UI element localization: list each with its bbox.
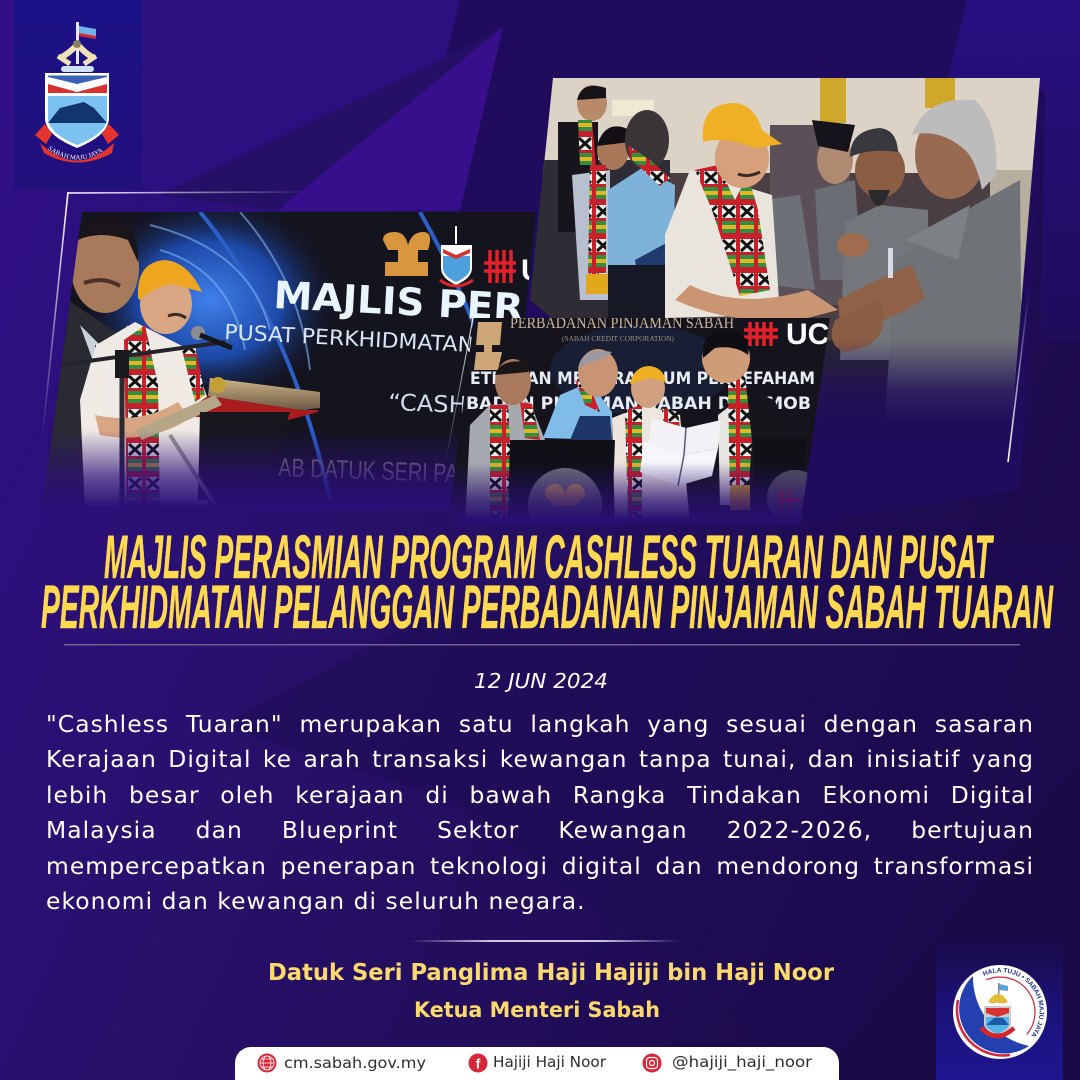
lectern right	[767, 470, 808, 524]
title	[41, 523, 1054, 641]
icon: facebook: f	[476, 1056, 481, 1072]
screen subtitle: PUSAT PERKHIDMATAN	[224, 320, 475, 357]
icon: instagram	[642, 1054, 662, 1072]
man left with lanyard	[465, 359, 545, 525]
contact bar	[235, 1047, 839, 1080]
website text: cm.sabah.gov.my	[284, 1054, 426, 1072]
backdrop title: PERBADANAN PINJAMAN SABAH	[510, 315, 734, 332]
man in blue shirt	[543, 349, 618, 440]
main guest in yellow cap	[665, 103, 838, 321]
backdrop line one: ETERAAN MEMORANDUM PERSEFAHAM	[470, 369, 815, 389]
lectern left with emblem	[508, 440, 615, 517]
backdrop logo	[474, 322, 502, 370]
photo: memorandum signing	[448, 318, 830, 525]
backdrop line two: BADAN PINJAMAN SABAH DAN MOB	[466, 394, 811, 414]
date: 12 JUN 2024	[474, 669, 608, 693]
body paragraph: ekonomi dan kewangan di seluruh negara.	[46, 887, 586, 915]
backdrop partner logo: UC	[786, 318, 829, 351]
frame lines: left photo	[42, 192, 310, 440]
photo: speech at lectern	[42, 212, 536, 510]
logos on screen	[383, 226, 543, 287]
motto: SABAH MAJU JAYA	[48, 146, 103, 160]
body paragraph: mempercepatkan penerapan teknologi digital dan mendorong transformasi	[46, 852, 1034, 880]
man right in black suit	[702, 330, 776, 510]
screen name: AB DATUK SERI PA	[278, 452, 459, 488]
guest blue shirt	[608, 110, 675, 320]
logos on screen: U	[521, 254, 543, 287]
minister position: Ketua Menteri Sabah	[414, 998, 660, 1022]
instagram text: @hajiji_haji_noor	[672, 1053, 813, 1072]
poster portrait	[40, 217, 140, 510]
guest smiling	[572, 126, 630, 300]
badge: Hala Tuju Sabah Maju Jaya: HALA TUJU • SABAH MAJU JAYA	[982, 968, 1044, 1036]
tab behind badge	[936, 930, 1063, 1080]
icon: facebook	[468, 1054, 488, 1072]
body paragraph: Kerajaan Digital ke arah transaksi kewangan tanpa tunai, dan inisiatif yang	[46, 745, 1034, 773]
photo: handshake with guests	[530, 78, 1050, 448]
microphone	[60, 326, 232, 510]
old guest black cap	[812, 120, 862, 280]
screen quote: “CASHL	[388, 390, 481, 419]
lectern	[135, 377, 320, 505]
man centre in yellow cap	[612, 366, 690, 525]
guest top left	[558, 85, 607, 232]
facebook text: Hajiji Haji Noor	[493, 1053, 607, 1071]
body paragraph	[46, 710, 1034, 915]
backdrop partner logo	[744, 322, 828, 346]
backdrop subtitle: (SABAH CREDIT CORPORATION)	[562, 334, 674, 343]
body paragraph: "Cashless Tuaran" merupakan satu langkah yang sesuai dengan sasaran	[46, 710, 1034, 738]
screen title: MAJLIS PER	[273, 273, 524, 330]
logo: Sabah crest	[35, 22, 119, 162]
tab behind crest	[14, 0, 142, 190]
body paragraph: Malaysia dan Blueprint Sektor Kewangan 2022-2026, bertujuan	[46, 816, 1034, 844]
guest grey hair	[832, 100, 1022, 420]
minister name: Datuk Seri Panglima Haji Hajiji bin Haji Noor	[268, 960, 835, 986]
speaker	[80, 260, 212, 510]
guest grey shirt	[762, 128, 930, 360]
signed documents	[640, 418, 721, 486]
frame lines: centre photo	[446, 318, 600, 460]
body paragraph: lebih besar oleh kerajaan di bawah Rangka Tindakan Ekonomi Digital	[46, 781, 1034, 809]
frame lines: right photo	[835, 290, 1029, 462]
badge: Hala Tuju Sabah Maju Jaya	[953, 965, 1047, 1059]
icon: website	[258, 1054, 276, 1072]
